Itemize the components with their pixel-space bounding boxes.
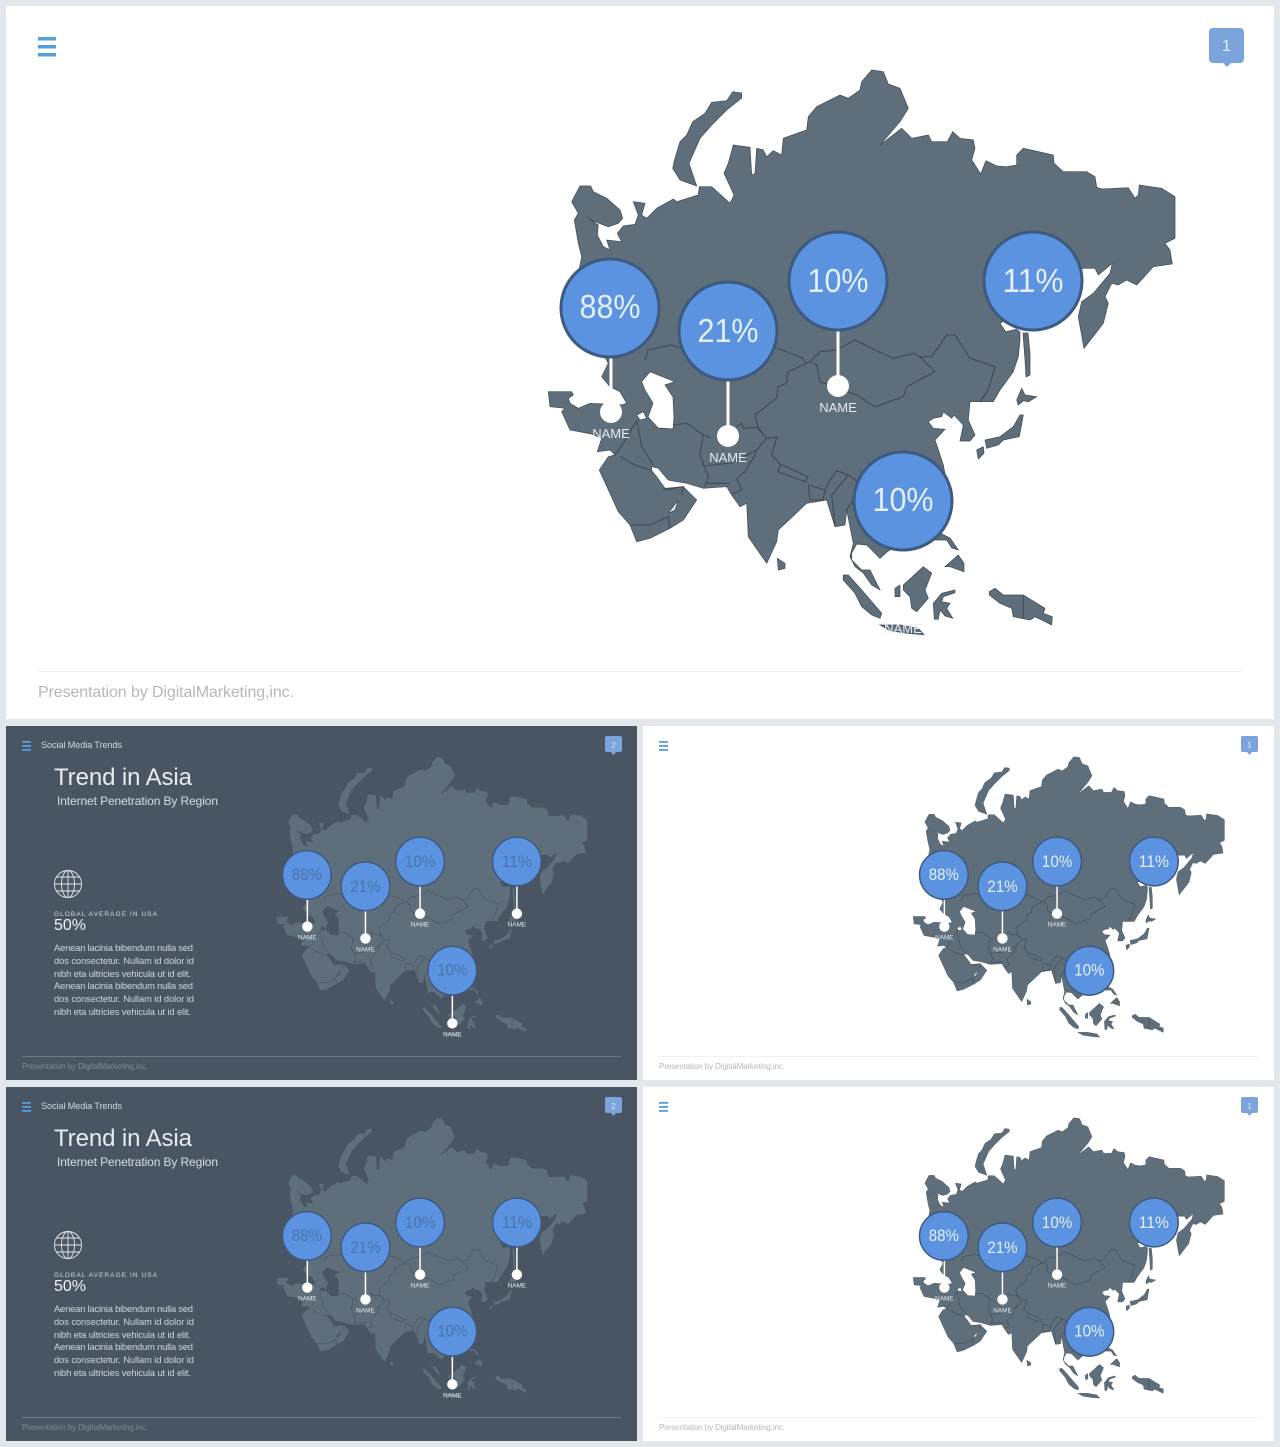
footer: Presentation by DigitalMarketing,inc. [22,1062,148,1071]
description: nibh eta ultricies vehicula ut id elit. [54,1329,191,1340]
map with bubbles: 88% [292,1227,322,1245]
section label: Social Media Trends [41,740,122,750]
map with bubbles [913,1118,1224,1398]
description: dos consectetur. Nullam id dolor id [54,955,194,966]
panel: dark slide bottom [6,1087,637,1441]
map with bubbles [276,1118,587,1399]
badge: page number [605,736,622,755]
map with bubbles: 10% [1042,1214,1072,1232]
map pins: NAME [709,450,747,465]
map pins: NAME [819,400,857,415]
icon: menu [22,741,31,751]
icon: menu [38,37,56,56]
stat label: GLOBAL AVERAGE IN USA [54,911,158,918]
bubble: 88%: 88% [580,288,640,325]
badge: page number [1209,28,1244,67]
panel: white slide bottom [643,1087,1274,1441]
stat value: 50% [54,1278,86,1295]
footer: Presentation by DigitalMarketing,inc. [38,684,294,701]
map with bubbles: 21% [987,1239,1018,1257]
stat value: 50% [54,917,86,934]
description: dos consectetur. Nullam id dolor id [54,1354,194,1365]
description: Aenean lacinia bibendum nulla sed [54,1303,193,1314]
icon: menu [22,1102,31,1112]
footer: Presentation by DigitalMarketing,inc. [22,1423,148,1432]
panel: white slide top [643,726,1274,1080]
map with bubbles: 10% [1042,853,1072,871]
map pins: NAME [884,621,922,636]
description: dos consectetur. Nullam id dolor id [54,993,194,1004]
description: Aenean lacinia bibendum nulla sed [54,980,193,991]
badge: page number: 1 [1222,38,1231,55]
footer: Presentation by DigitalMarketing,inc. [659,1423,785,1432]
icon: menu [659,741,668,751]
bubble: 11%: 11% [1002,262,1064,299]
section label: Social Media Trends [41,1101,122,1111]
icon: menu [659,1102,668,1112]
title: Trend in Asia [54,764,193,791]
map with bubbles: 11% [1139,1214,1169,1232]
map with bubbles: NAME [1048,1283,1067,1290]
bubble: 10% north: 10% [808,262,868,299]
map with bubbles: NAME [508,922,527,929]
panel: dark slide top [6,726,637,1080]
bubble: 88% [561,259,659,357]
map with bubbles: 10% [1074,962,1104,980]
map with bubbles: 10% [405,1214,435,1232]
map with bubbles: 11% [502,1214,532,1232]
bubble: 11% [984,232,1082,330]
map with bubbles: NAME [356,1307,375,1314]
description [54,1303,194,1378]
footer: Presentation by DigitalMarketing,inc. [659,1062,785,1071]
map pins: NAME [592,426,630,441]
map with bubbles: 21% [350,878,381,896]
map with bubbles: 10% [405,853,435,871]
map with bubbles: NAME [443,1392,462,1399]
map with bubbles: 10% [1074,1323,1104,1341]
bubble: 10% north [789,232,887,330]
badge: page number: 2 [611,741,616,750]
bubble: 10% south [854,452,952,550]
map with bubbles: NAME [993,1307,1012,1314]
icon: globe [54,1232,82,1258]
badge: page number [1241,736,1258,755]
map with bubbles: NAME [356,946,375,953]
badge: page number: 1 [1247,1102,1252,1111]
map with bubbles: NAME [508,1283,527,1290]
map with bubbles: 88% [929,866,959,884]
map with bubbles: 10% [437,1323,467,1341]
badge: page number [605,1097,622,1116]
map of Asia [548,70,1175,635]
map with bubbles: NAME [935,1295,954,1302]
icon: globe [54,870,82,898]
description: nibh eta ultricies vehicula ut id elit. [54,1006,191,1017]
subtitle: Internet Penetration By Region [57,1155,218,1169]
map with bubbles [913,757,1224,1037]
map with bubbles: 21% [987,878,1018,896]
title: Trend in Asia [54,1125,193,1152]
badge: page number: 1 [1247,741,1252,750]
map with bubbles: NAME [298,934,317,941]
map with bubbles: NAME [993,946,1012,953]
map with bubbles: NAME [411,1283,430,1290]
map with bubbles: 11% [502,853,532,871]
description [54,942,194,1017]
description: nibh eta ultricies vehicula ut id elit. [54,968,191,979]
map with bubbles: NAME [1048,922,1067,929]
bubble: 21%: 21% [698,312,758,349]
subtitle: Internet Penetration By Region [57,794,218,808]
description: Aenean lacinia bibendum nulla sed [54,942,193,953]
map with bubbles: NAME [411,922,430,929]
bubble: 10% south: 10% [872,481,934,518]
map with bubbles: 10% [437,962,467,980]
map with bubbles: NAME [443,1031,462,1038]
map with bubbles: 21% [350,1239,381,1257]
badge: page number: 2 [611,1102,616,1111]
panel: main white slide [6,6,1274,719]
badge: page number [1241,1097,1258,1116]
map with bubbles: 88% [929,1227,959,1245]
description: dos consectetur. Nullam id dolor id [54,1316,194,1327]
map pins [592,331,922,636]
map with bubbles: 88% [292,866,322,884]
map with bubbles: 11% [1139,853,1169,871]
bubble: 21% [679,282,777,380]
map with bubbles: NAME [298,1295,317,1302]
map with bubbles [276,757,587,1038]
description: Aenean lacinia bibendum nulla sed [54,1341,193,1352]
map with bubbles: NAME [935,934,954,941]
description: nibh eta ultricies vehicula ut id elit. [54,1367,191,1378]
stat label: GLOBAL AVERAGE IN USA [54,1272,158,1279]
